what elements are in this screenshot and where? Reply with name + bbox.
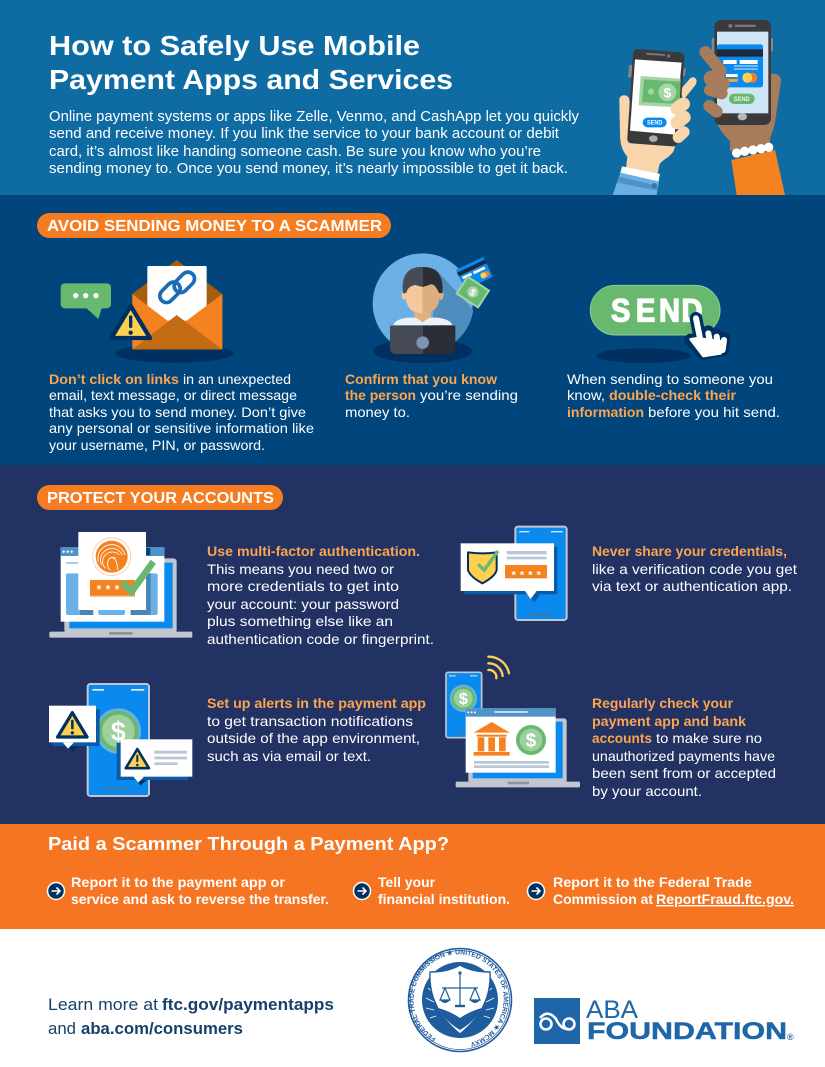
icon: laptop with fingerprint: * xyxy=(106,583,111,597)
tip: don't click on links: email, text message, or direct message xyxy=(49,387,297,403)
tip: double-check information: double-check their xyxy=(609,387,737,403)
title xyxy=(49,30,453,95)
icon: phone with shield xyxy=(461,527,567,620)
step: report to app: service and ask to reverse the transfer. xyxy=(71,891,329,907)
logo: ABA Foundation xyxy=(534,996,794,1045)
icon: hands holding phones: SEND xyxy=(647,121,663,127)
title: Payment Apps and Services xyxy=(49,64,453,95)
step: report to FTC xyxy=(528,874,794,907)
intro text: send and receive money. If you link the service to your bank account or debit xyxy=(49,126,559,142)
intro text xyxy=(49,109,580,177)
step: report to app xyxy=(48,874,329,907)
tip: multi-factor authentication: your account: your password xyxy=(207,596,399,612)
step: tell your institution: financial institution. xyxy=(378,891,510,907)
tip: regularly check: to make sure no xyxy=(656,730,762,746)
icon: send button with pointing hand: SEND xyxy=(611,292,703,329)
tip: regularly check: been sent from or accepted xyxy=(592,765,776,781)
tip: set up alerts: Set up alerts in the payment app xyxy=(207,695,426,711)
logo: ABA Foundation: ABA xyxy=(586,996,638,1024)
tip: regularly check: by your account. xyxy=(592,783,702,799)
right hand back xyxy=(718,74,781,152)
tip: double-check information xyxy=(567,371,780,420)
icon: laptop with fingerprint: * xyxy=(124,583,129,597)
tip: double-check information: know, xyxy=(567,387,605,403)
logo: ABA Foundation: ® xyxy=(787,1032,794,1042)
intro text: Online payment systems or apps like Zelle, Venmo, and CashApp let you quickly xyxy=(49,109,580,125)
tip: set up alerts: to get transaction notifications xyxy=(207,713,413,729)
tip: never share credentials: like a verification code you get xyxy=(592,561,797,577)
tip: multi-factor authentication: authentication code or fingerprint. xyxy=(207,631,434,647)
left sleeve xyxy=(613,172,659,195)
bill: $ xyxy=(467,287,478,299)
tip: double-check information: information xyxy=(567,404,644,420)
icon: laptop with fingerprint: * xyxy=(115,583,120,597)
tip: regularly check: payment app and bank xyxy=(592,713,746,729)
icon: phone and laptop with bank: $ xyxy=(459,691,468,708)
tip: don't click on links: your username, PIN, or password. xyxy=(49,437,265,453)
tip: confirm the person xyxy=(345,371,518,420)
footer links: aba.com/consumers xyxy=(81,1020,243,1038)
icon: phone with shield: * xyxy=(511,569,516,581)
icon: hands holding phones: SEND xyxy=(734,97,750,103)
tip: confirm the person: the person xyxy=(345,387,416,403)
tip: set up alerts: such as via email or text. xyxy=(207,748,371,764)
tip: don't click on links xyxy=(49,371,314,453)
protect section band xyxy=(0,465,825,824)
left phone xyxy=(628,65,633,77)
logo: ABA Foundation: FOUNDATION xyxy=(587,1018,787,1045)
tip: multi-factor authentication: plus something else like an xyxy=(207,613,393,629)
icon: phone with shield: * xyxy=(528,569,533,581)
tip: never share credentials xyxy=(592,543,797,594)
tip: multi-factor authentication: This means you need two or xyxy=(207,561,394,577)
heading pill: avoid sending money xyxy=(37,213,391,238)
tip: double-check information: before you hit send. xyxy=(648,404,780,420)
card xyxy=(456,257,493,290)
step: tell your institution xyxy=(354,874,510,907)
bill xyxy=(639,76,681,107)
icon: hands holding phones: $ xyxy=(663,84,671,100)
icon: send button with pointing hand xyxy=(590,285,724,363)
send button xyxy=(643,118,667,127)
tip: regularly check: accounts xyxy=(592,730,652,746)
tip: regularly check: Regularly check your xyxy=(592,695,734,711)
header band xyxy=(0,0,825,195)
tip: multi-factor authentication: more credentials to get into xyxy=(207,578,399,594)
tip: confirm the person: Confirm that you know xyxy=(345,371,497,387)
step: report to FTC: Commission at xyxy=(553,891,653,907)
step: report to FTC: Report it to the Federal Trade xyxy=(553,874,752,890)
right phone xyxy=(712,38,715,55)
tip: never share credentials: via text or authentication app. xyxy=(592,578,792,594)
avoid section band xyxy=(0,195,825,465)
tip: don't click on links: any personal or sensitive information like xyxy=(49,420,314,436)
tip: multi-factor authentication: Use multi-factor authentication. xyxy=(207,543,420,559)
icon: envelope with link and warning xyxy=(61,260,234,363)
footer links: and xyxy=(48,1020,76,1038)
footer links xyxy=(48,996,334,1038)
body xyxy=(393,318,452,325)
icon: laptop with fingerprint: * xyxy=(97,583,102,597)
head xyxy=(402,290,407,300)
icon: phone with shield: * xyxy=(536,569,541,581)
footer links: ftc.gov/paymentapps xyxy=(162,996,334,1014)
icon: person with laptop and card xyxy=(373,253,493,363)
footer links: Learn more at xyxy=(48,996,158,1014)
icon: phone with shield: * xyxy=(520,569,525,581)
icon: phone and laptop with bank xyxy=(446,657,580,787)
intro text: sending money to. Once you send money, it’s nearly impossible to get it back. xyxy=(49,161,568,177)
tip: set up alerts xyxy=(207,695,426,764)
left hand back xyxy=(619,95,677,175)
icon: hands holding phones xyxy=(613,20,785,195)
tip: never share credentials: Never share your credentials, xyxy=(592,543,787,559)
tip: don't click on links: Don’t click on links xyxy=(49,371,179,387)
tip: confirm the person: money to. xyxy=(345,404,410,420)
tip: don't click on links: that asks you to send money. Don’t give xyxy=(49,404,306,420)
tip: multi-factor authentication xyxy=(207,543,434,647)
tip: regularly check: unauthorized payments have xyxy=(592,748,775,764)
logo: FTC seal: FEDERAL TRADE COMMISSION ★ UNITED STATES OF AMERICA ★ MCMXV xyxy=(409,950,508,1048)
step: report to app: Report it to the payment app or xyxy=(71,874,286,890)
tip: double-check information: When sending to someone you xyxy=(567,371,773,387)
icon: phone and laptop with bank: $ xyxy=(526,730,537,751)
intro text: card, it’s almost like handing someone cash. Be sure you know who you’re xyxy=(49,144,541,160)
heading pill: protect your accounts: PROTECT YOUR ACCOUNTS xyxy=(47,490,274,507)
icon: phone with alerts xyxy=(49,684,192,796)
heading pill: avoid sending money: AVOID SENDING MONEY TO A SCAMMER xyxy=(47,218,382,235)
heading: paid a scammer: Paid a Scammer Through a Payment App? xyxy=(48,833,449,854)
heading pill: protect your accounts xyxy=(37,485,283,510)
laptop xyxy=(390,326,423,354)
tip: confirm the person: you’re sending xyxy=(420,387,518,403)
orange sleeve xyxy=(731,150,785,195)
icon: phone with alerts: $ xyxy=(111,716,126,746)
title: How to Safely Use Mobile xyxy=(49,30,420,61)
tip: don't click on links: in an unexpected xyxy=(183,371,291,387)
left fingers xyxy=(677,104,683,108)
step: report to FTC: ReportFraud.ftc.gov. xyxy=(656,891,794,907)
tip: set up alerts: outside of the app environment, xyxy=(207,730,420,746)
icon: laptop with fingerprint xyxy=(49,532,192,638)
paid a scammer band xyxy=(0,824,825,929)
step: tell your institution: Tell your xyxy=(378,874,436,890)
tip: regularly check xyxy=(592,695,776,799)
right fingers xyxy=(705,52,721,71)
